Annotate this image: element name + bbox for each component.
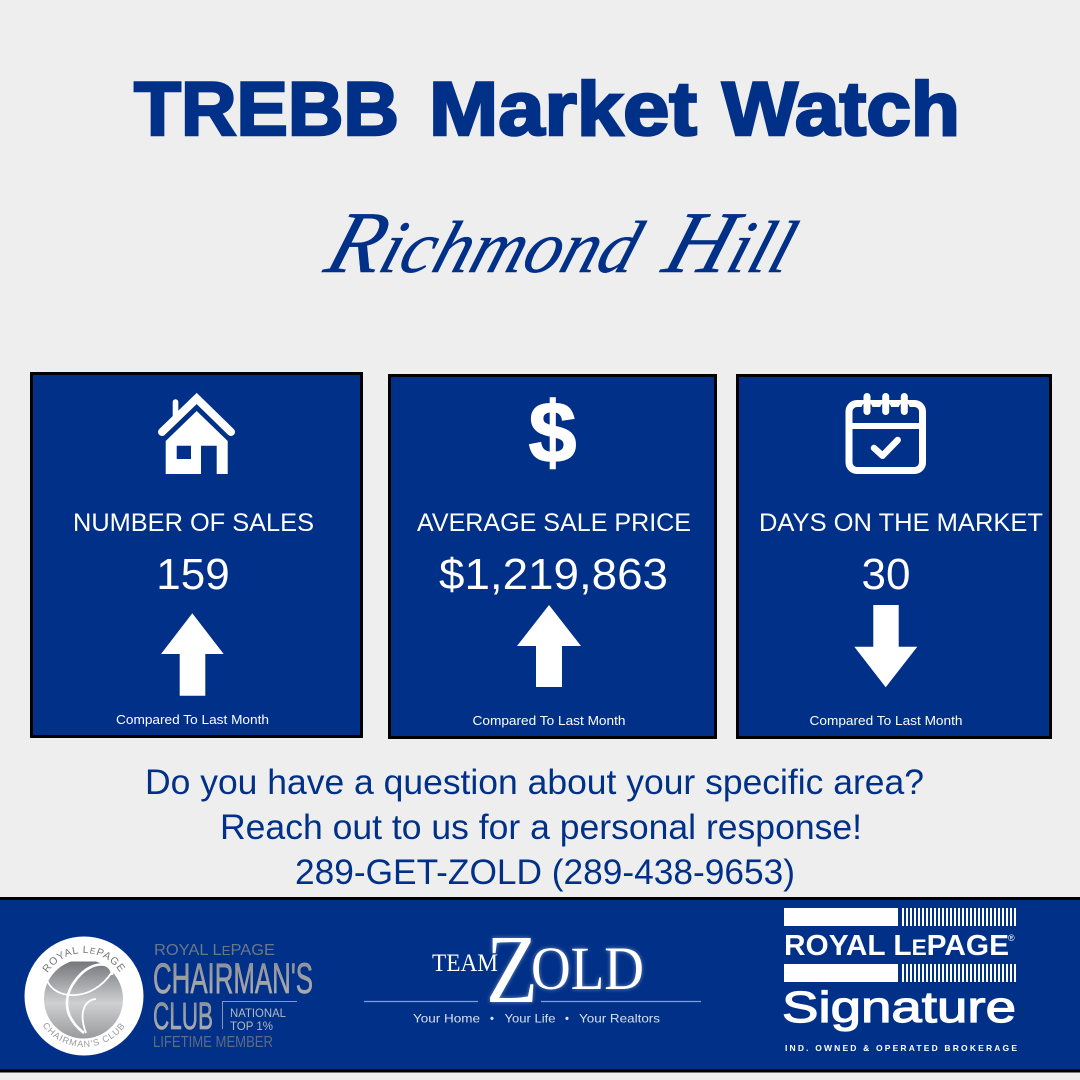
logo: royal lepage signature: ® bbox=[1008, 933, 1015, 943]
logo: team zold: • bbox=[565, 1012, 569, 1026]
logo: royal lepage signature bbox=[782, 908, 1017, 1053]
panel: average sale price bbox=[390, 376, 716, 738]
logo: team zold: • bbox=[490, 1012, 494, 1026]
panel background bbox=[390, 376, 716, 738]
title bbox=[134, 67, 960, 152]
logo: chairman's club badge: ROYAL LEPAGE bbox=[42, 946, 126, 972]
call to action text bbox=[145, 763, 924, 892]
logo: team zold: TEAM bbox=[432, 950, 498, 977]
phone line: 289-GET-ZOLD (289-438-9653) bbox=[295, 853, 795, 892]
panel: number of sales bbox=[32, 374, 362, 736]
logo: chairman's club wordmark: NATIONAL bbox=[230, 1008, 287, 1020]
arrow: up bbox=[517, 605, 581, 687]
value: 30 bbox=[862, 550, 910, 599]
subtitle: Richmond Hill: Richmond bbox=[315, 194, 657, 291]
value: 159 bbox=[156, 550, 230, 599]
arrow: down bbox=[854, 605, 917, 687]
value: $1,219,863 bbox=[439, 550, 668, 599]
logo: royal lepage signature: IND. OWNED & OPERATED BROKERAGE bbox=[785, 1043, 1017, 1053]
logo: team zold: Z bbox=[486, 916, 538, 1023]
invitation line: Reach out to us for a personal response! bbox=[220, 808, 862, 847]
title: Market bbox=[429, 67, 697, 152]
note: Compared To Last Month bbox=[472, 713, 626, 728]
logo: team zold bbox=[364, 916, 701, 1026]
footer background bbox=[0, 898, 1080, 1071]
logo: royal lepage signature: Signature bbox=[782, 983, 1016, 1032]
logo: team zold: Z bbox=[486, 916, 538, 1023]
logo: team zold: OLD bbox=[531, 936, 644, 1003]
logo: chairman's club wordmark: CHAIRMAN'S bbox=[153, 955, 313, 1003]
logo: team zold: Your Realtors bbox=[579, 1012, 660, 1026]
icon: dollar sign: $ bbox=[529, 385, 576, 481]
logo: royal lepage signature: ROYAL LEPAGE bbox=[784, 930, 1009, 962]
note: Compared To Last Month bbox=[810, 713, 962, 728]
logo: chairman's club badge: CHAIRMAN'S CLUB bbox=[44, 1023, 124, 1048]
subtitle: Richmond Hill bbox=[315, 194, 811, 291]
question line: Do you have a question about your specific area? bbox=[145, 763, 924, 802]
icon: house bbox=[162, 398, 231, 474]
footer band bbox=[0, 897, 1080, 1072]
title: TREBB bbox=[134, 67, 399, 152]
subtitle: Richmond Hill: Hill bbox=[653, 194, 811, 291]
note: Compared To Last Month bbox=[116, 712, 269, 727]
label: AVERAGE SALE PRICE bbox=[417, 509, 691, 537]
logo: chairman's club wordmark: CLUB bbox=[153, 996, 213, 1038]
logo: team zold: OLD bbox=[531, 936, 644, 1003]
logo: team zold: Your Life bbox=[504, 1012, 556, 1026]
logo: chairman's club wordmark: TOP 1% bbox=[230, 1021, 273, 1033]
arrow: up bbox=[161, 613, 224, 696]
title: Watch bbox=[722, 67, 960, 152]
label: DAYS ON THE MARKET bbox=[759, 509, 1043, 537]
logo: chairman's club wordmark bbox=[153, 942, 313, 1051]
panel: days on the market bbox=[738, 376, 1050, 738]
logo: chairman's club wordmark: ROYAL LEPAGE bbox=[154, 942, 275, 959]
logo: team zold: Your Home bbox=[413, 1012, 480, 1026]
icon: calendar bbox=[849, 396, 922, 470]
label: NUMBER OF SALES bbox=[73, 509, 314, 537]
panel background bbox=[32, 374, 362, 736]
logo: chairman's club wordmark: LIFETIME MEMBER bbox=[153, 1034, 273, 1051]
logo: chairman's club badge bbox=[24, 936, 144, 1056]
panel background bbox=[738, 376, 1050, 738]
